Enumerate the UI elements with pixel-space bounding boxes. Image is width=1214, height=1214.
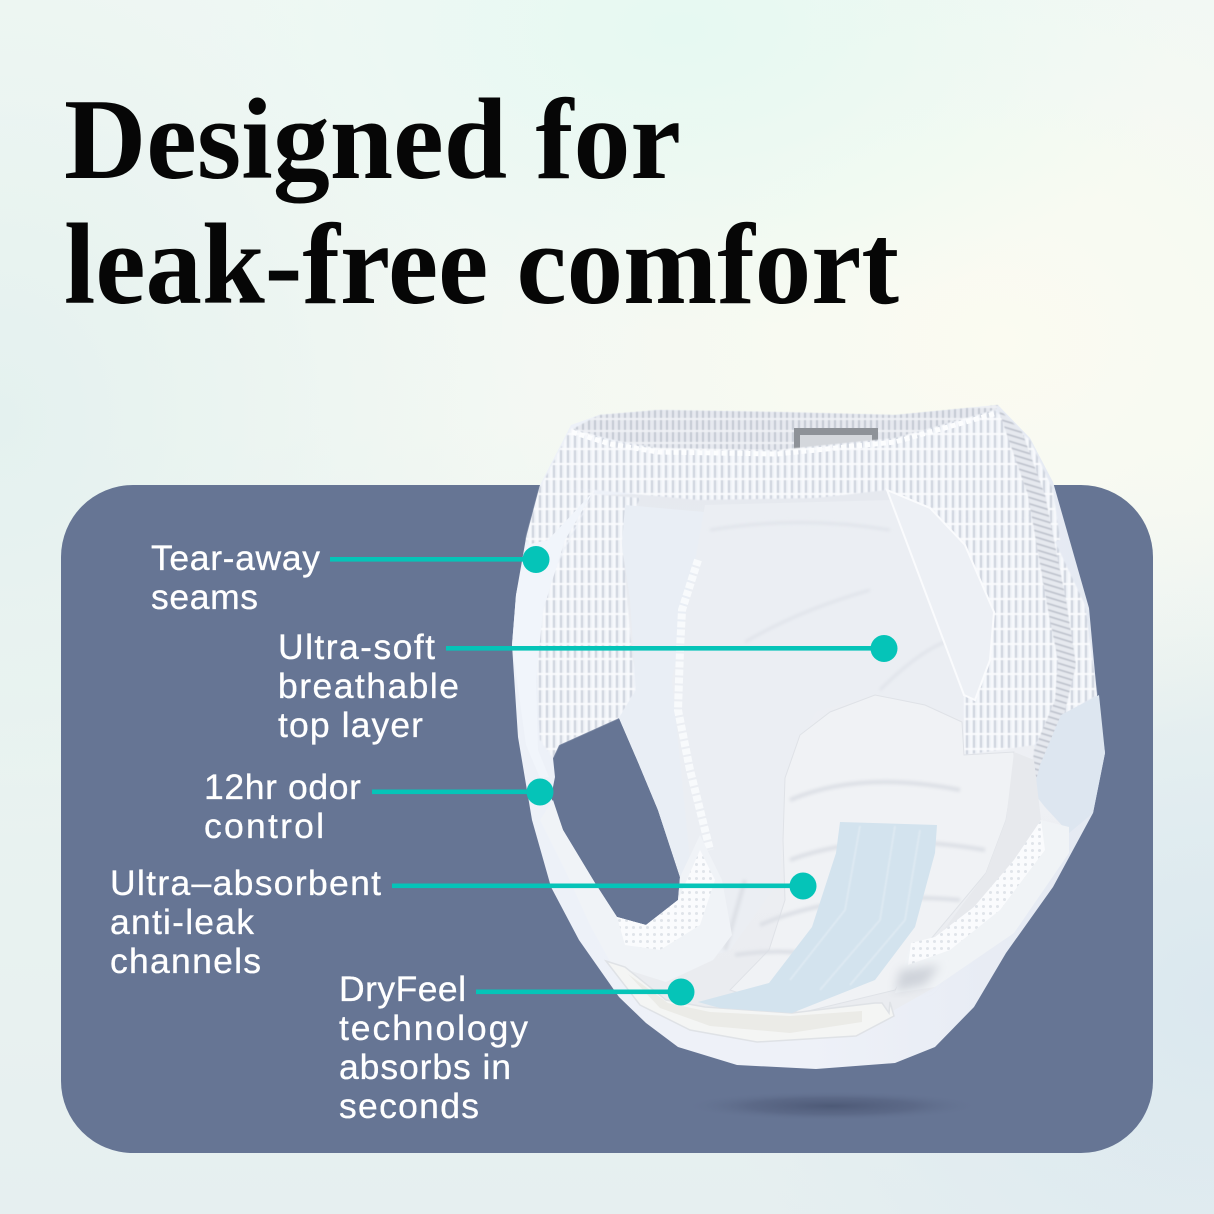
front waistband — [540, 410, 1060, 560]
panel: slate background — [61, 485, 1153, 1153]
callout: top layer: top layer — [278, 705, 423, 745]
callout: odor control: control — [204, 806, 324, 846]
blue DryFeel strip — [698, 822, 937, 1013]
lace leak guard edge — [678, 560, 710, 850]
absorbent core cross-section — [606, 961, 894, 1042]
waist tag — [794, 428, 878, 450]
right lace leak guard — [895, 820, 1069, 993]
outer shell — [512, 405, 1105, 1069]
left soft panel — [619, 505, 705, 877]
shadow under product — [682, 1091, 982, 1121]
callout: DryFeel technology: technology — [339, 1008, 528, 1048]
callout: DryFeel technology: seconds — [339, 1086, 479, 1126]
callout: top layer: breathable — [278, 666, 459, 706]
callout: odor control — [204, 767, 554, 846]
right blue-white outer panel — [1033, 695, 1105, 833]
left inner elastic panel — [536, 494, 640, 758]
back waistband inside — [571, 405, 998, 452]
callout: tear-away seams: seams — [151, 577, 258, 617]
white left seam strip — [512, 492, 593, 778]
top layer wrinkles — [710, 522, 950, 690]
title: leak-free comfort — [64, 201, 899, 328]
callout: top layer: Ultra-soft — [278, 627, 435, 667]
callout: DryFeel technology: absorbs in — [339, 1047, 511, 1087]
right pad wing — [940, 752, 1041, 935]
product illustration: cutaway underwear — [512, 405, 1105, 1069]
callout: top layer — [278, 627, 898, 745]
callout: DryFeel technology — [339, 969, 694, 1126]
left tear-away seam panel — [526, 486, 595, 575]
right seam band — [998, 408, 1076, 800]
right flap — [887, 490, 994, 700]
pad shading folds — [725, 782, 985, 965]
right ruffled side panel — [920, 500, 1097, 755]
callout: odor control: 12hr odor — [204, 767, 361, 807]
callout: DryFeel technology: DryFeel — [339, 969, 466, 1009]
inner central liner — [595, 490, 1069, 1033]
title — [64, 76, 899, 328]
ultra-soft top layer — [672, 500, 965, 960]
absorbent raised pad — [730, 695, 1014, 1013]
waistband highlight edge — [572, 414, 994, 454]
callout: anti-leak channels: channels — [110, 941, 261, 981]
left lower leg gathers — [540, 800, 732, 982]
callout: tear-away seams: Tear-away — [151, 538, 320, 578]
callout: tear-away seams — [151, 538, 550, 617]
callout: anti-leak channels: Ultra–absorbent — [110, 863, 381, 903]
callout: anti-leak channels: anti-leak — [110, 902, 254, 942]
callout: anti-leak channels — [110, 863, 816, 981]
title: Designed for — [64, 76, 681, 203]
